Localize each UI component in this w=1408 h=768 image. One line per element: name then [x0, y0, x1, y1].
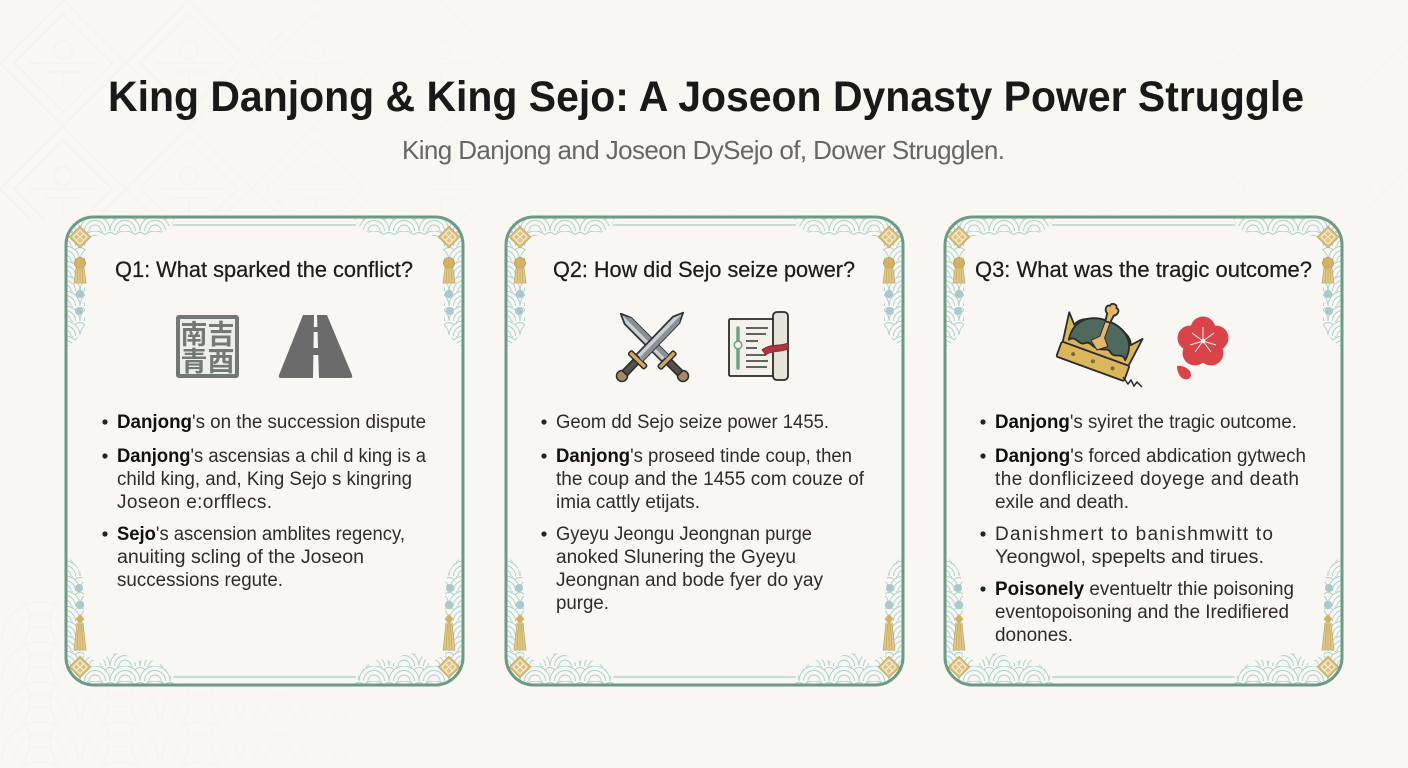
bullet list Q3: Poisonely eventueltr thie poisoning — [995, 579, 1294, 600]
bullet list Q1: Danjong's on the succession dispute — [117, 412, 426, 433]
icon: royal seal: 吉 — [208, 320, 234, 350]
bullet list Q1: successions regute. — [117, 570, 283, 591]
icon: decree scroll — [729, 312, 788, 380]
bullet list Q2: anoked Slunering the Gyeyu — [556, 547, 796, 568]
icon: royal seal: 青 — [180, 347, 208, 377]
panel: Q3 outcome — [944, 216, 1343, 686]
bullet list Q2: Geom dd Sejo seize power 1455. — [556, 412, 829, 433]
heading Q2: Q2: How did Sejo seize power? — [553, 257, 855, 282]
bullet list Q3: exile and death. — [995, 492, 1129, 513]
bullet list Q3: eventopoisoning and the Iredifiered — [995, 602, 1289, 623]
bullet list Q1: child king, and, King Sejo s kingring — [117, 469, 412, 490]
icon: royal seal — [176, 315, 239, 378]
bullet list Q1: Sejo's ascension amblites regency, — [117, 524, 405, 545]
icon: fallen crown — [1054, 291, 1150, 387]
panel: Q1 conflict — [65, 216, 464, 686]
bullet list Q2: Jeongnan and bode fyer do yay — [556, 570, 823, 591]
icon: royal seal: 南 — [180, 320, 208, 350]
bullet list Q1: Joseon e:orfflecs. — [117, 492, 272, 513]
bullet list Q2: Danjong's proseed tinde coup, then — [556, 446, 852, 467]
bullet list Q3: donones. — [995, 625, 1073, 646]
bullet list Q3 — [980, 412, 1306, 646]
bullet list Q1: Danjong's ascensias a chil d king is a — [117, 446, 426, 467]
heading Q1: Q1: What sparked the conflict? — [115, 257, 413, 282]
bullet list Q1: anuiting scling of the Joseon — [117, 547, 364, 568]
panel: Q2 seizure — [505, 216, 904, 686]
bullet list Q3: Yeongwol, spepelts and tirues. — [995, 547, 1264, 568]
bullet list Q2: imia cattly etijats. — [556, 492, 700, 513]
bullet list Q1 — [102, 412, 426, 591]
icon: crossed swords — [610, 305, 695, 388]
bullet list Q2: purge. — [556, 593, 609, 614]
heading Q3: Q3: What was the tragic outcome? — [975, 257, 1312, 282]
card frame 1 — [65, 216, 464, 686]
icon: royal seal: 酉 — [208, 347, 234, 377]
title: King Danjong & King Sejo: A Joseon Dynasty Power Struggle — [108, 73, 1304, 121]
bullet list Q3: the donflicizeed doyege and death — [995, 469, 1299, 490]
bullet list Q3: Danjong's forced abdication gytwech — [995, 446, 1306, 467]
bullet list Q3: Danishmert to banishmwitt to — [995, 524, 1273, 545]
bullet list Q3: Danjong's syiret the tragic outcome. — [995, 412, 1297, 433]
subtitle: King Danjong and Joseon DySejo of, Dower Strugglen. — [402, 135, 1005, 165]
bullet list Q2: the coup and the 1455 com couze of — [556, 469, 865, 490]
card frame 2 — [505, 216, 904, 686]
icon: road — [279, 315, 352, 378]
card frame 3 — [944, 216, 1343, 686]
bullet list Q2: Gyeyu Jeongu Jeongnan purge — [556, 524, 812, 545]
bullet list Q2 — [541, 412, 865, 614]
icon: plum blossom — [1177, 316, 1228, 379]
